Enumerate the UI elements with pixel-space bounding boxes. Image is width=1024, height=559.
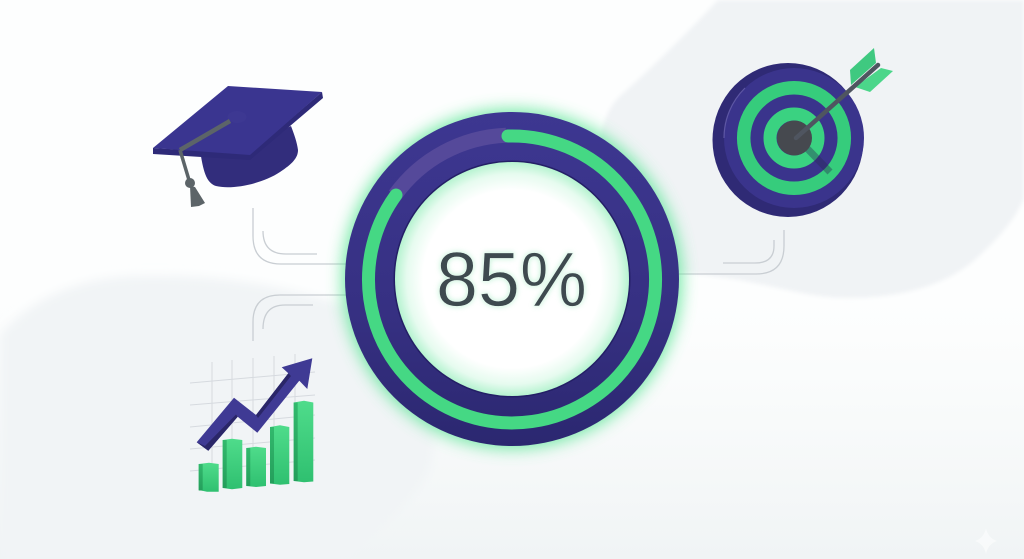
- icon: graduation cap: [153, 86, 323, 207]
- cap crown: [200, 126, 298, 187]
- cap tassel: [180, 121, 230, 207]
- sparkle watermark: [975, 528, 997, 554]
- ring unfilled track: [395, 135, 506, 195]
- target back disc: [712, 63, 864, 217]
- icon: target: [712, 48, 893, 217]
- inner green ring: [770, 114, 818, 162]
- bullseye: [777, 120, 812, 156]
- arrow fletching: [850, 48, 893, 92]
- connector lines: graduation cap: [253, 208, 346, 264]
- connector lines: target: [678, 230, 784, 274]
- ring base: [345, 112, 679, 446]
- ring inner edge: [394, 160, 630, 398]
- icon: growth chart: [190, 354, 315, 492]
- outer green ring: [744, 88, 844, 188]
- outer glow: [342, 109, 682, 449]
- trend arrow: [197, 358, 312, 451]
- target face: [724, 68, 864, 208]
- cap button: [228, 111, 246, 123]
- cap board: [153, 86, 323, 160]
- ring center: [395, 162, 629, 396]
- bars: [199, 401, 313, 492]
- progress ring: [342, 109, 682, 449]
- connector lines: growth chart: [253, 295, 346, 341]
- ring progress arc: [369, 136, 656, 423]
- arrow shadow: [797, 138, 830, 172]
- text glow: 85%: [436, 237, 587, 323]
- arrow shaft: [796, 65, 878, 138]
- percentage value: 85%: [436, 237, 587, 323]
- chart grid: [190, 354, 315, 471]
